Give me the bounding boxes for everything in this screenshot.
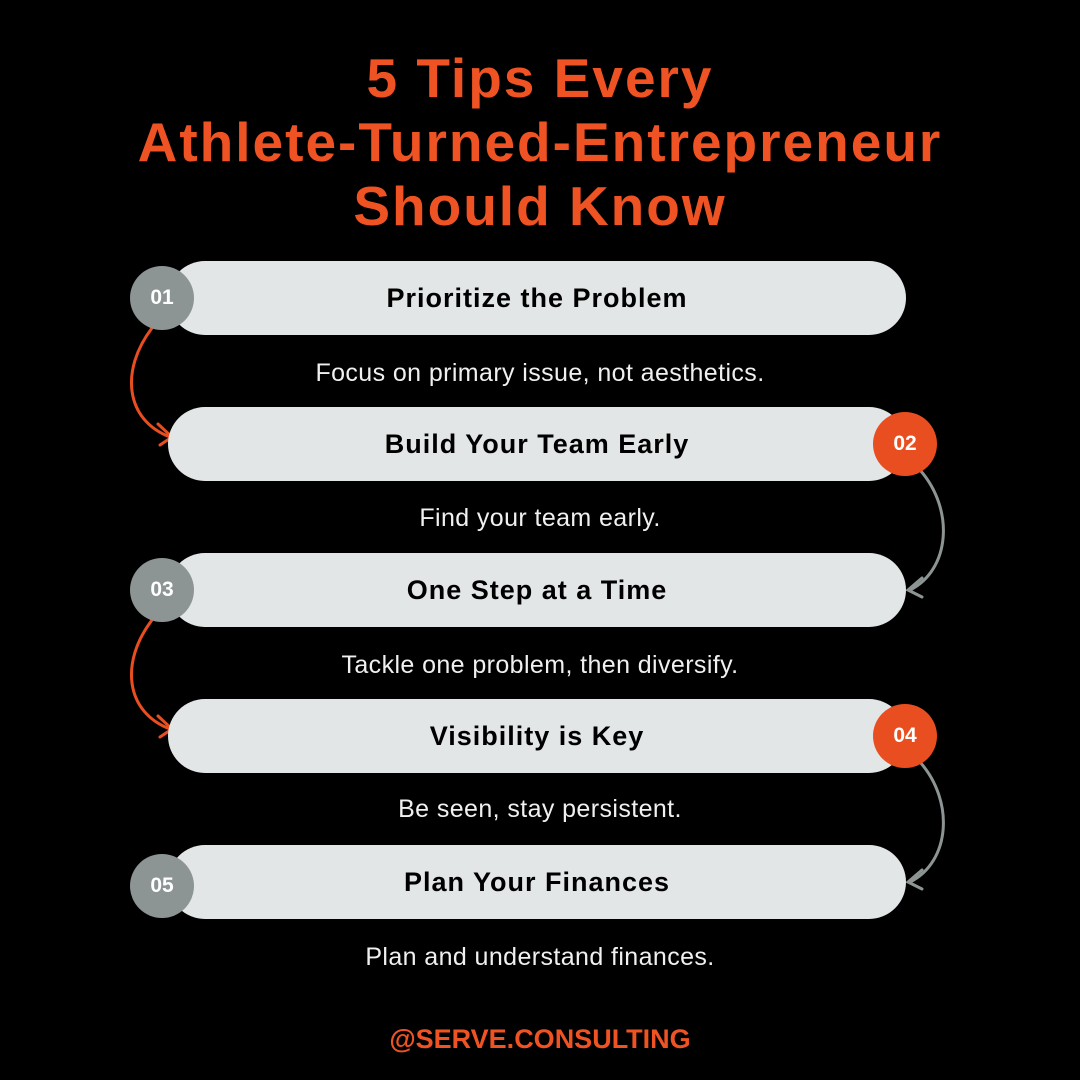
circle 02 bbox=[873, 412, 937, 476]
arrow 2 bbox=[908, 470, 943, 597]
circle 05 bbox=[130, 854, 194, 918]
circle 03 bbox=[130, 558, 194, 622]
circle 03: 03 bbox=[150, 578, 174, 601]
circle 01 bbox=[130, 266, 194, 330]
pill 4: Visibility is Key bbox=[430, 721, 644, 751]
pill 2 bbox=[168, 407, 906, 481]
circle 04 bbox=[873, 704, 937, 768]
pill 3 bbox=[168, 553, 906, 627]
circle 05: 05 bbox=[150, 874, 174, 897]
arrow 4 bbox=[908, 762, 943, 889]
pill 2: Build Your Team Early bbox=[385, 429, 689, 459]
arrow 3 bbox=[131, 620, 172, 737]
circle 02: 02 bbox=[893, 432, 917, 455]
title: Should Know bbox=[353, 175, 727, 237]
circle 01: 01 bbox=[150, 286, 174, 309]
pill 5 bbox=[168, 845, 906, 919]
pill 4 bbox=[168, 699, 906, 773]
title bbox=[138, 47, 942, 237]
pill 1 bbox=[168, 261, 906, 335]
title: 5 Tips Every bbox=[366, 47, 714, 109]
pill 3: One Step at a Time bbox=[407, 575, 667, 605]
arrow 1 bbox=[131, 328, 172, 445]
desc 5: Plan and understand finances. bbox=[365, 943, 715, 971]
desc 2: Find your team early. bbox=[419, 504, 661, 532]
title: Athlete-Turned-Entrepreneur bbox=[138, 111, 942, 173]
pill 1: Prioritize the Problem bbox=[386, 283, 688, 313]
desc 4: Be seen, stay persistent. bbox=[398, 795, 682, 823]
circle 04: 04 bbox=[893, 724, 917, 747]
footer handle: @SERVE.CONSULTING bbox=[389, 1024, 691, 1054]
pill 5: Plan Your Finances bbox=[404, 867, 670, 897]
desc 3: Tackle one problem, then diversify. bbox=[341, 651, 739, 679]
desc 1: Focus on primary issue, not aesthetics. bbox=[315, 359, 765, 387]
